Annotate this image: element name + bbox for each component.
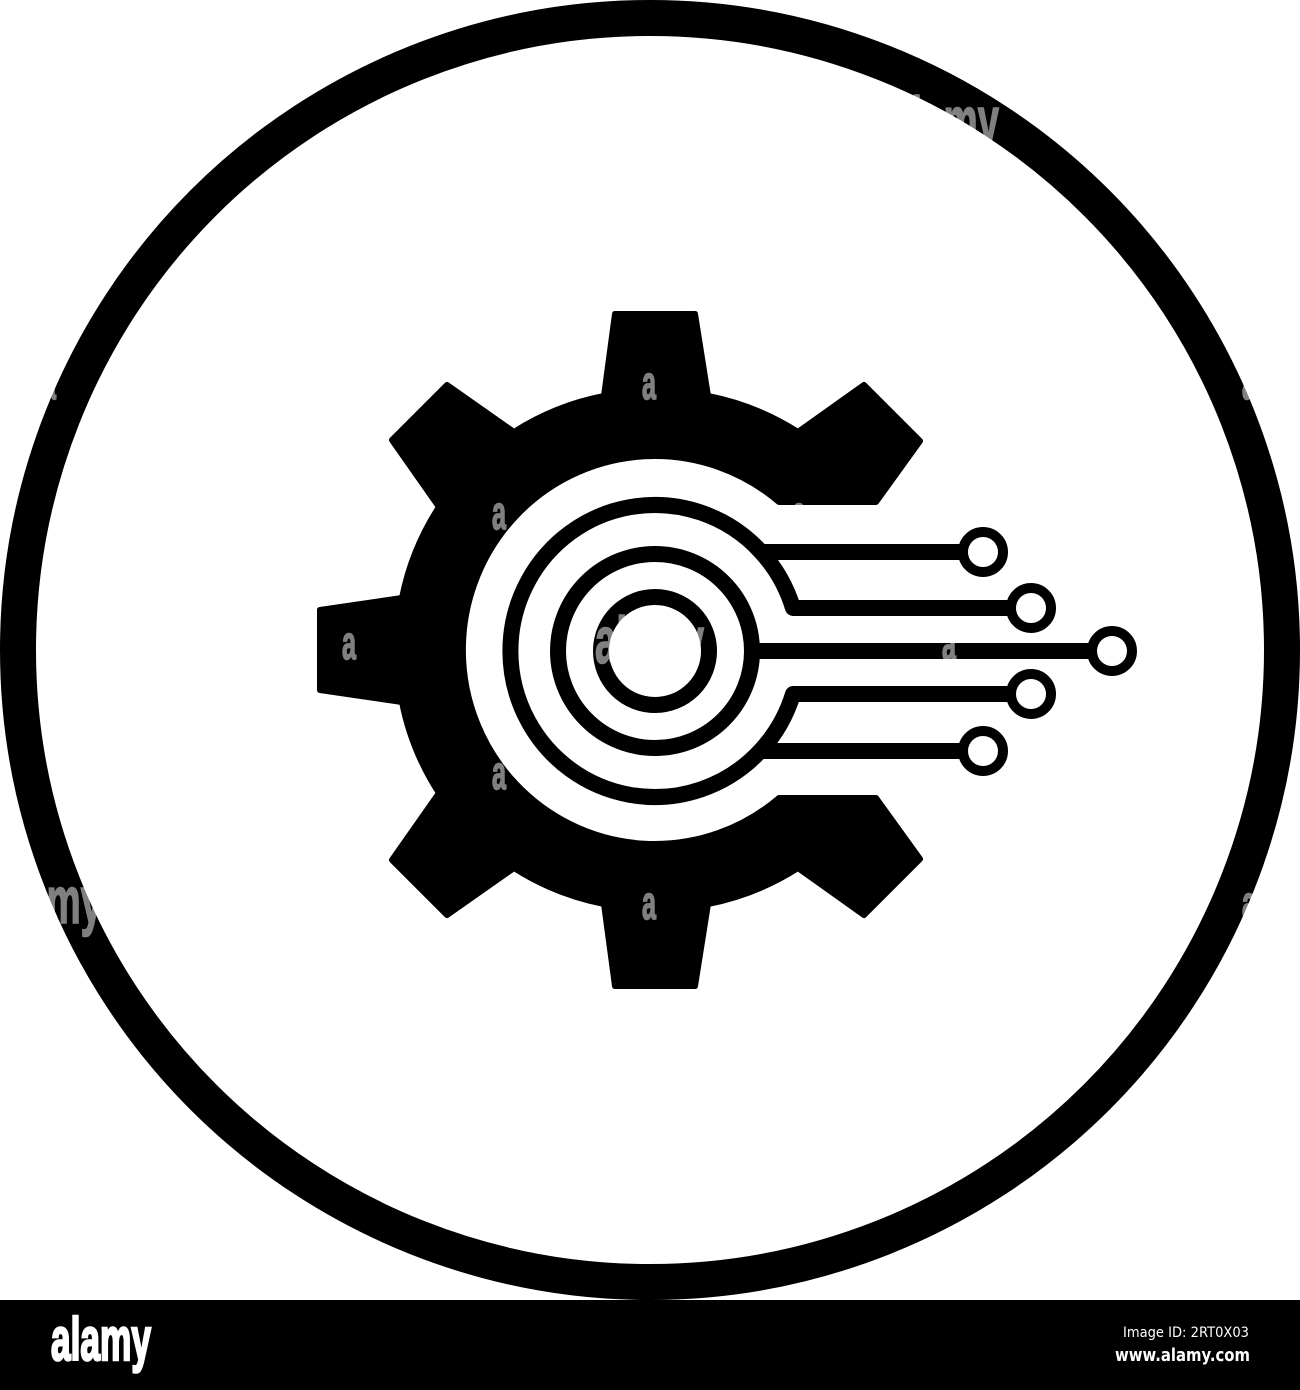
icon: circuit end nodes (963, 532, 1132, 771)
image id: Image ID: 2RT0X03 (1123, 1325, 1249, 1341)
watermark marks: a (1242, 876, 1256, 929)
icon: gear with open right side (320, 314, 920, 986)
watermark marks: a (642, 876, 656, 929)
footer logo: alamy (51, 1306, 151, 1373)
watermark marks: a (1242, 356, 1256, 409)
icon: circuit rings and traces (510, 505, 1112, 797)
watermark marks: a (492, 746, 506, 799)
watermark marks: alamy (595, 603, 704, 677)
inner ring (601, 597, 709, 705)
upper trace (760, 544, 983, 560)
outer ring with two traces (510, 505, 1031, 797)
watermark marks: a (42, 356, 56, 409)
watermark marks (0, 83, 1256, 937)
watermark marks: a (342, 616, 356, 669)
website: www.alamy.com (1115, 1345, 1250, 1366)
lower trace (760, 743, 983, 759)
watermark marks: a (492, 486, 506, 539)
middle ring (558, 554, 752, 748)
watermark marks: a (642, 356, 656, 409)
watermark marks: alamy (890, 83, 999, 157)
watermark marks: a (942, 617, 956, 670)
watermark marks: a (792, 486, 806, 539)
center trace (750, 643, 1112, 659)
footer bar (0, 1300, 1300, 1390)
